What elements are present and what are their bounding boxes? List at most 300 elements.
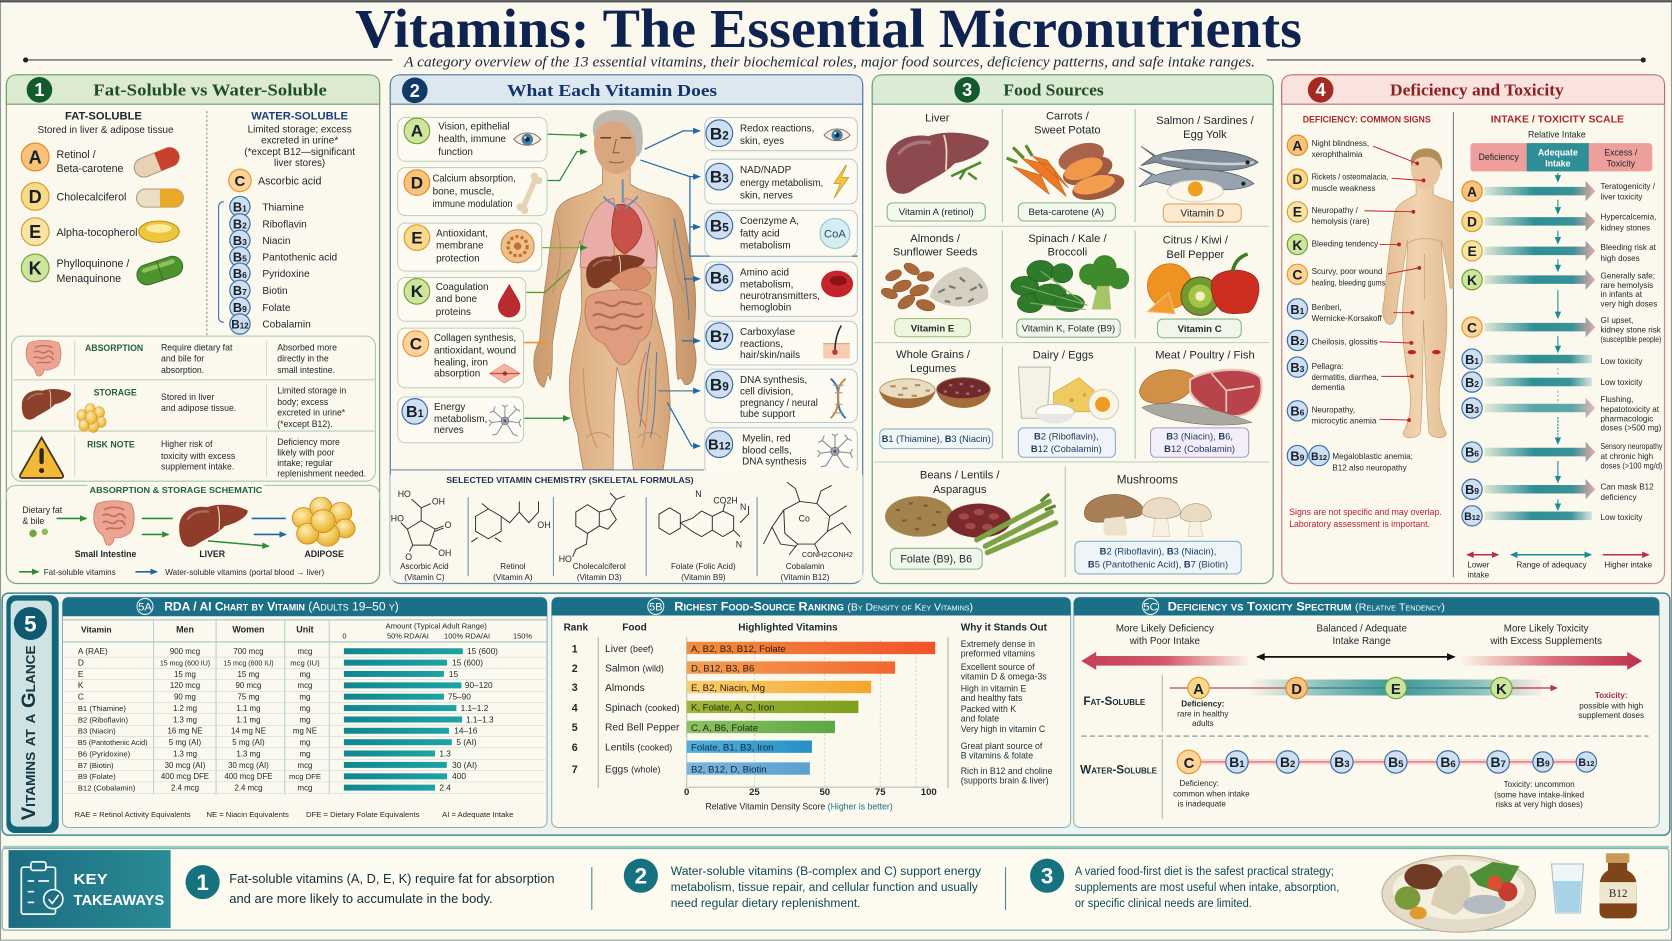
comparison table: directly in the [277, 354, 329, 364]
table header: Amount (Typical Adult Range) [385, 621, 487, 630]
table header [81, 621, 532, 640]
scale header: Intake [1545, 159, 1571, 169]
card: vitamin E: E [411, 228, 423, 247]
card: vitamin B6: hemoglobin [740, 303, 791, 314]
table rows and bars: D [78, 658, 84, 668]
key takeaways label [9, 850, 171, 928]
fat-soluble spectrum: supplement doses [1578, 711, 1644, 720]
icon: lightning bolt [834, 166, 849, 199]
intake and toxicity scale: rare hemolysis [1601, 281, 1653, 290]
table rows and bars: mcg DFE [289, 772, 321, 781]
table rows and bars: B5 (Pantothenic Acid) [78, 738, 148, 747]
water-soluble column: C [235, 173, 246, 190]
fat-soluble column: Stored in liver & adipose tissue [38, 125, 174, 136]
fat-soluble column: Phylloquinone / [57, 258, 129, 270]
table rows and bars: B2 (Riboflavin) [78, 715, 129, 724]
intake and toxicity scale: INTAKE / TOXICITY SCALE [1491, 114, 1624, 125]
why it stands out: (supports brain & liver) [961, 776, 1049, 786]
scale header: Deficiency [1479, 152, 1519, 162]
axis labels: 25 [749, 787, 760, 798]
card: vitamin B6: B6 [710, 268, 729, 287]
water-soluble column: Limited storage; excess [248, 124, 352, 135]
abbreviations: DFE = Dietary Folate Equivalents [306, 810, 420, 819]
water-soluble spectrum: common when intake [1173, 789, 1250, 798]
molecule: cobalamin [763, 482, 853, 582]
why it stands out: Packed with K [961, 704, 1016, 714]
water-soluble column: (*except B12—significant [244, 147, 355, 158]
card: vitamin B5 [705, 210, 857, 256]
deficiency column: B6 [1290, 404, 1305, 419]
lungs [580, 199, 657, 268]
heading: Deficiency vs Toxicity Spectrum (Relative Tendency) [1168, 600, 1445, 614]
deficiency column: Wernicke-Korsakoff [1312, 314, 1383, 323]
molecule: ascorbic acid: O [445, 520, 452, 530]
axis labels: 75 [875, 787, 886, 798]
table rows and bars: 1.3 mg [236, 749, 260, 758]
molecule: folate: N [736, 539, 742, 549]
table rows and bars: 15 (600) [452, 658, 483, 668]
card: vitamin B5: B5 [710, 217, 729, 236]
table rows and bars: 1.3 [439, 748, 451, 758]
intake and toxicity scale: Hypercalcemia, [1601, 212, 1656, 221]
takeaway 3: supplements are most useful when intake, absorption, [1075, 880, 1339, 894]
card: vitamin C: Collagen synthesis, [434, 333, 516, 344]
table rows and bars: 2.4 mcg [171, 784, 199, 793]
food: beans, lentils, asparagus: Beans / Lentils / [920, 469, 1000, 481]
food: mushrooms: B5 (Pantothenic Acid), B7 (Biotin) [1088, 560, 1228, 570]
card: vitamin B9: DNA synthesis, [740, 375, 807, 386]
absorption and storage schematic: ABSORPTION & STORAGE SCHEMATIC [90, 486, 262, 495]
panel 5C: deficiency vs toxicity spectrum: Intake Range [1333, 636, 1391, 647]
molecule: retinol [471, 501, 551, 582]
intake and toxicity scale: D [1467, 214, 1477, 230]
icon: small intestine [94, 501, 134, 545]
heading: RDA / AI Chart by Vitamin (Adults 19–50 y) [164, 600, 399, 614]
key takeaways label: KEY [74, 872, 108, 888]
scale legend: Higher intake [1604, 561, 1653, 570]
icon: capsule D [136, 189, 183, 207]
deficiency column: Scurvy, poor wound [1312, 267, 1383, 276]
icon: neuron [818, 434, 852, 468]
water-soluble spectrum: Toxicity: uncommon [1504, 780, 1575, 789]
heading: Food Sources [1003, 81, 1104, 100]
deficiency column: K [1292, 237, 1302, 253]
molecule: ascorbic acid [391, 489, 452, 582]
comparison table: body; excess [277, 397, 329, 407]
deficiency column: A [1292, 138, 1302, 154]
illustration: B12 bottle [1599, 853, 1637, 918]
icon: fat cells [77, 403, 106, 433]
deficiency column: hemolysis (rare) [1312, 217, 1370, 226]
fat-soluble column: Retinol / [57, 149, 96, 161]
table rows and bars: mcg [298, 647, 312, 656]
rank and food labels: Eggs (whole) [605, 764, 661, 775]
deficiency column: D [1292, 171, 1302, 187]
abbreviations: AI = Adequate Intake [442, 810, 513, 819]
table rows and bars: 15 mcg (600 IU) [160, 661, 210, 668]
water-soluble spectrum: B5 [1388, 754, 1404, 770]
absorption and storage schematic [6, 484, 380, 577]
food: liver: Liver [925, 112, 950, 124]
fat-soluble spectrum [1170, 677, 1644, 728]
scale header: Adequate [1538, 147, 1578, 157]
intake and toxicity scale: very high doses [1601, 300, 1657, 309]
food: dairy and eggs: Dairy / Eggs [1033, 350, 1094, 362]
number badge 3: 3 [962, 80, 972, 100]
fat-soluble column: A [29, 147, 42, 167]
card: vitamin C: antioxidant, wound [434, 346, 516, 357]
ranking bars: C, A, B6, Folate [691, 723, 758, 734]
water-soluble column [219, 111, 355, 334]
icon: liver [22, 389, 71, 420]
takeaway 3: 3 [1041, 864, 1053, 889]
water-soluble column: Riboflavin [262, 219, 307, 230]
food: citrus, kiwi, bell pepper: Vitamin C [1178, 324, 1222, 335]
heading: 5A [138, 602, 152, 614]
intake and toxicity scale: B1 [1465, 352, 1479, 367]
panel 5C: deficiency vs toxicity spectrum: Water-Soluble [1080, 763, 1158, 776]
icon: CoA [820, 219, 850, 248]
food: beans, lentils, asparagus: Asparagus [933, 484, 987, 496]
water-soluble spectrum: B6 [1440, 754, 1456, 770]
molecule: cobalamin: (Vitamin B12) [781, 573, 830, 582]
table rows and bars: 75–90 [448, 692, 471, 702]
absorption and storage schematic: Fat-soluble vitamins [44, 568, 116, 577]
intake and toxicity scale: Sensory neuropathy [1601, 442, 1663, 451]
icon: DNA [831, 379, 846, 418]
panel 5A: RDA chart [62, 597, 547, 828]
icon: softgel E [139, 221, 179, 242]
panel 5C: deficiency vs toxicity spectrum: Balanced / Adequate [1316, 624, 1407, 635]
table rows and bars: 1.1 mg [236, 715, 260, 724]
table rows and bars: 75 mg [238, 693, 259, 702]
card: vitamin B1: nerves [434, 425, 464, 436]
card: vitamin A [398, 118, 547, 161]
tab: section 5 label: Vitamins at a Glance [19, 645, 40, 820]
column headers: Rank [564, 622, 588, 633]
intestines [585, 290, 652, 365]
why it stands out: preformed vitamins [961, 649, 1036, 659]
takeaway 3: or specific clinical needs are limited. [1075, 896, 1252, 910]
leg vessels [640, 341, 657, 437]
card: vitamin D: immune modulation [433, 199, 513, 210]
card: vitamin B12: DNA synthesis [742, 457, 807, 468]
card: vitamin D [398, 168, 547, 216]
water-soluble column: Thiamine [262, 202, 304, 213]
leader lines [525, 131, 857, 446]
number badge 1 [27, 77, 52, 103]
arrow: toxicity [1462, 652, 1642, 670]
panel 5C: deficiency vs toxicity spectrum: with Excess Supplements [1489, 636, 1602, 647]
deficiency column: Bleeding tendency [1312, 240, 1379, 249]
deficiency column: Cheilosis, glossitis [1312, 337, 1378, 346]
deficiency column [1287, 114, 1453, 529]
icon: eye [824, 129, 850, 141]
takeaway 3 [1030, 859, 1339, 910]
intake and toxicity scale: (susceptible people) [1601, 335, 1662, 344]
card: vitamin B12 [705, 428, 857, 474]
why it stands out: vitamin D & omega-3s [961, 672, 1047, 682]
molecule: ascorbic acid: O [405, 552, 412, 562]
fat-soluble spectrum: rare in healthy [1177, 709, 1229, 718]
food: meat, poultry, fish: B3 (Niacin), B6, [1166, 432, 1233, 442]
intake and toxicity scale: doses (>100 mg/d) [1601, 462, 1663, 471]
table rows and bars: mg [299, 715, 310, 724]
scale rows: liver toxicity [1601, 193, 1643, 202]
table rows and bars: 1.3 mg [173, 715, 197, 724]
card: vitamin B5: metabolism [740, 241, 791, 252]
deficiency column: Night blindness, [1312, 139, 1369, 148]
why it stands out: Extremely dense in [961, 639, 1035, 649]
icon: clipboard [21, 862, 63, 914]
absorption and storage schematic: LIVER [199, 549, 226, 559]
panel: food sources [872, 75, 1273, 584]
water-soluble spectrum: Deficiency: [1179, 779, 1219, 788]
intake and toxicity scale: Low toxicity [1601, 357, 1643, 366]
ranking bars: K, Folate, A, C, Iron [691, 703, 775, 714]
table rows and bars: 15 mcg (600 IU) [223, 661, 274, 668]
fat-soluble column: K [29, 258, 42, 278]
card: vitamin B5: Coenzyme A, [740, 216, 799, 227]
card: vitamin D: Calcium absorption, [433, 174, 516, 185]
scale legend: intake [1468, 571, 1490, 580]
fat-soluble spectrum: D [1291, 681, 1302, 698]
intake and toxicity scale: Bleeding risk at [1601, 243, 1657, 252]
note: Laboratory assessment is important. [1289, 519, 1430, 529]
food: carrots and sweet potato: Beta-carotene (A) [1029, 207, 1104, 218]
panel 5C: deficiency vs toxicity spectrum: Fat-Soluble [1083, 695, 1146, 708]
comparison table [12, 336, 375, 481]
fat-soluble spectrum: adults [1192, 719, 1214, 728]
why it stands out: B vitamins & folate [961, 750, 1033, 760]
axis labels: 100 [921, 787, 937, 798]
card: vitamin A: health, immune [438, 134, 506, 145]
deficiency column: B12 also neuropathy [1332, 464, 1408, 473]
rank and food labels: Almonds [605, 683, 645, 694]
water-soluble spectrum: B12 [1578, 757, 1594, 769]
table rows and bars: K [78, 680, 84, 690]
water-soluble spectrum: B3 [1334, 754, 1350, 770]
table rows and bars: 5 mg (AI) [232, 738, 265, 747]
number badge 2 [402, 78, 428, 103]
card: vitamin K [398, 277, 526, 321]
food: whole grains and legumes: Legumes [910, 363, 956, 375]
intake and toxicity scale: kidney stone risk [1601, 326, 1662, 335]
ranking bars: E, B2, Niacin, Mg [691, 683, 765, 694]
intake and toxicity scale: Flushing, [1601, 395, 1633, 404]
note: Signs are not specific and may overlap. [1289, 507, 1442, 517]
takeaway 2: need regular dietary replenishment. [671, 896, 861, 910]
card: vitamin B9 [705, 369, 857, 423]
icon: CoA: CoA [824, 229, 846, 241]
axis labels: 50 [819, 787, 830, 798]
icon: eye [514, 133, 541, 145]
panel 5C: deficiency vs toxicity spectrum: More Likely Toxicity [1504, 624, 1589, 635]
axis labels: 0 [684, 787, 689, 798]
comparison table: Higher risk of [161, 439, 213, 449]
intake and toxicity scale: B3 [1465, 401, 1479, 416]
heading: What Each Vitamin Does [507, 81, 718, 100]
deficiency column: dementia [1312, 383, 1345, 392]
ranking bars: A, B2, B3, B12, Folate [691, 644, 786, 655]
card: vitamin B1: Energy [434, 402, 465, 413]
rank and food labels: 6 [572, 742, 578, 754]
molecule: vitamin D3: Cholecalciferol [573, 562, 626, 571]
food: salmon, sardines, egg yolk: Vitamin D [1180, 209, 1224, 220]
card: vitamin C [398, 328, 524, 388]
intake and toxicity scale: in infants at [1601, 290, 1643, 299]
chemistry section: SELECTED VITAMIN CHEMISTRY (SKELETAL FORMULAS) [446, 476, 694, 485]
molecule: ascorbic acid: OH [432, 497, 445, 507]
food: mushrooms: Mushrooms [1117, 473, 1178, 486]
food: salmon, sardines, egg yolk: Salmon / Sardines / [1156, 115, 1255, 127]
card: vitamin B9: B9 [710, 376, 729, 395]
intake and toxicity scale: doses (>500 mg) [1601, 424, 1662, 433]
table rows and bars: B6 (Pyridoxine) [78, 749, 131, 758]
food: whole grains and legumes [880, 349, 993, 449]
comparison table: likely with poor [277, 448, 335, 458]
rank and food labels: Red Bell Pepper [605, 723, 680, 734]
table rows and bars: mg [299, 693, 310, 702]
water-soluble spectrum: B1 [1229, 754, 1245, 770]
card: vitamin B3: B3 [710, 168, 729, 187]
fat-soluble spectrum: possible with high [1579, 701, 1643, 710]
deficiency column: B12 [1311, 451, 1327, 463]
molecule: cobalamin: Co [799, 514, 810, 524]
table rows and bars: 90–120 [465, 680, 493, 690]
card: vitamin C: healing, iron [434, 357, 488, 368]
absorption and storage schematic: Water-soluble vitamins (portal blood → liver) [165, 568, 325, 577]
water-soluble column: B6 [233, 266, 247, 281]
card: vitamin B6 [705, 262, 857, 316]
water-soluble column: Pantothenic acid [262, 252, 337, 263]
number badge 4: 4 [1316, 80, 1326, 100]
rank and food labels: Lentils (cooked) [605, 743, 672, 754]
absorption and storage schematic: & bile [22, 516, 44, 526]
molecule: cobalamin: CONH2 [827, 550, 853, 559]
water-soluble column: B5 [233, 250, 247, 265]
table rows and bars: B3 (Niacin) [78, 727, 116, 736]
food: salmon, sardines, egg yolk [1139, 115, 1258, 222]
deficiency column: C [1292, 267, 1302, 283]
table rows and bars: mcg [298, 681, 312, 690]
water-soluble column: B1 [233, 199, 247, 214]
column headers [564, 622, 1048, 633]
table rows and bars: mcg [298, 784, 312, 793]
scale rows: A [1467, 183, 1477, 199]
card: vitamin B7: Carboxylase [740, 327, 796, 338]
food: mushrooms: B2 (Riboflavin), B3 (Niacin), [1100, 547, 1216, 557]
tab: section 5 label [6, 595, 59, 833]
card: vitamin C: absorption [434, 369, 480, 380]
card: vitamin B6: metabolism, [740, 280, 793, 291]
number badge 3 [954, 77, 980, 103]
food: almonds and sunflower seeds: Almonds / [910, 233, 961, 245]
rank and food labels: 7 [572, 764, 578, 776]
comparison table: and bile for [161, 354, 204, 364]
arrow: adequate range [1257, 656, 1454, 658]
icon: red blood cell [821, 271, 853, 297]
fat-soluble spectrum: Toxicity: [1595, 691, 1628, 700]
fat-soluble column: Menaquinone [57, 273, 121, 285]
table rows and bars: 15 mg [238, 670, 259, 679]
arrow [57, 517, 86, 519]
water-soluble column: Niacin [262, 236, 290, 247]
rank and food labels: Liver (beef) [605, 644, 653, 655]
card: vitamin B7: B7 [710, 327, 729, 346]
liver and stomach [586, 255, 645, 288]
intake and toxicity scale: hepatotoxicity at [1601, 405, 1660, 414]
ranking bars: Folate, B1, B3, Iron [691, 743, 774, 754]
icon: neuron [489, 405, 521, 436]
tab: section 5 label: 5 [24, 612, 37, 637]
key takeaways band [2, 846, 1669, 932]
molecule: vitamin D3: (Vitamin D3) [577, 573, 622, 582]
scale header: Excess / [1604, 147, 1638, 157]
table rows and bars: mg [299, 738, 310, 747]
icon: cell membrane [501, 230, 534, 263]
icon: wound [489, 364, 520, 383]
molecule: cobalamin: CONH2 [802, 550, 827, 559]
table rows and bars: 1.1 mg [236, 704, 260, 713]
food: spinach, kale, broccoli [1011, 233, 1129, 337]
water-soluble column: Biotin [262, 286, 288, 297]
food: liver: Vitamin A (retinol) [899, 207, 974, 218]
chemistry section [390, 470, 863, 582]
takeaway 3: A varied food-first diet is the safest practical strategy; [1075, 864, 1334, 878]
table rows and bars: 1.3 mg [173, 749, 197, 758]
table rows and bars: 5 mg (AI) [169, 738, 202, 747]
food: almonds and sunflower seeds [880, 233, 988, 337]
intake and toxicity scale: B6 [1465, 445, 1479, 460]
comparison table: RISK NOTE [87, 440, 135, 450]
card: vitamin B9: tube support [740, 409, 795, 420]
comparison table: replenishment needed. [277, 468, 366, 478]
heading: 5B [649, 602, 663, 614]
water-soluble column: Ascorbic acid [258, 176, 321, 188]
food: carrots and sweet potato: Sweet Potato [1034, 125, 1101, 137]
fat-soluble spectrum: A [1193, 681, 1204, 698]
table rows and bars: 15 (600) [467, 646, 498, 656]
head [594, 112, 639, 174]
molecule: retinol: Retinol [500, 562, 526, 571]
deficiency column: Neuropathy, [1312, 406, 1355, 415]
ranking bars: B2, B12, D, Biotin [691, 764, 767, 775]
food: whole grains and legumes: Whole Grains / [896, 349, 971, 361]
card: vitamin B12: B12 [708, 437, 731, 454]
water-soluble column: B12 [231, 319, 249, 332]
comparison table: small intestine. [277, 365, 335, 375]
table rows and bars: C [78, 692, 84, 702]
table rows and bars: 2.4 mcg [234, 784, 262, 793]
deficiency column: B3 [1290, 360, 1305, 375]
intake and toxicity scale: B9 [1465, 482, 1479, 497]
table rows and bars: B9 (Folate) [78, 772, 116, 781]
card: vitamin D: bone, muscle, [433, 186, 494, 197]
card: vitamin E [398, 223, 542, 271]
why it stands out [961, 639, 1053, 786]
table rows and bars: B1 (Thiamine) [78, 704, 126, 713]
why it stands out: and folate [961, 714, 999, 724]
water-soluble column: B2 [233, 216, 247, 231]
molecule: vitamin D3: HO [559, 554, 572, 564]
molecule: folate: (Vitamin B9) [681, 573, 726, 582]
card: vitamin B12: blood cells, [742, 445, 792, 456]
table rows and bars: 14 mg NE [231, 727, 266, 736]
card: vitamin C: C [410, 334, 422, 353]
panel: deficiency and toxicity [1282, 75, 1665, 584]
table rows and bars: 400 [452, 771, 466, 781]
